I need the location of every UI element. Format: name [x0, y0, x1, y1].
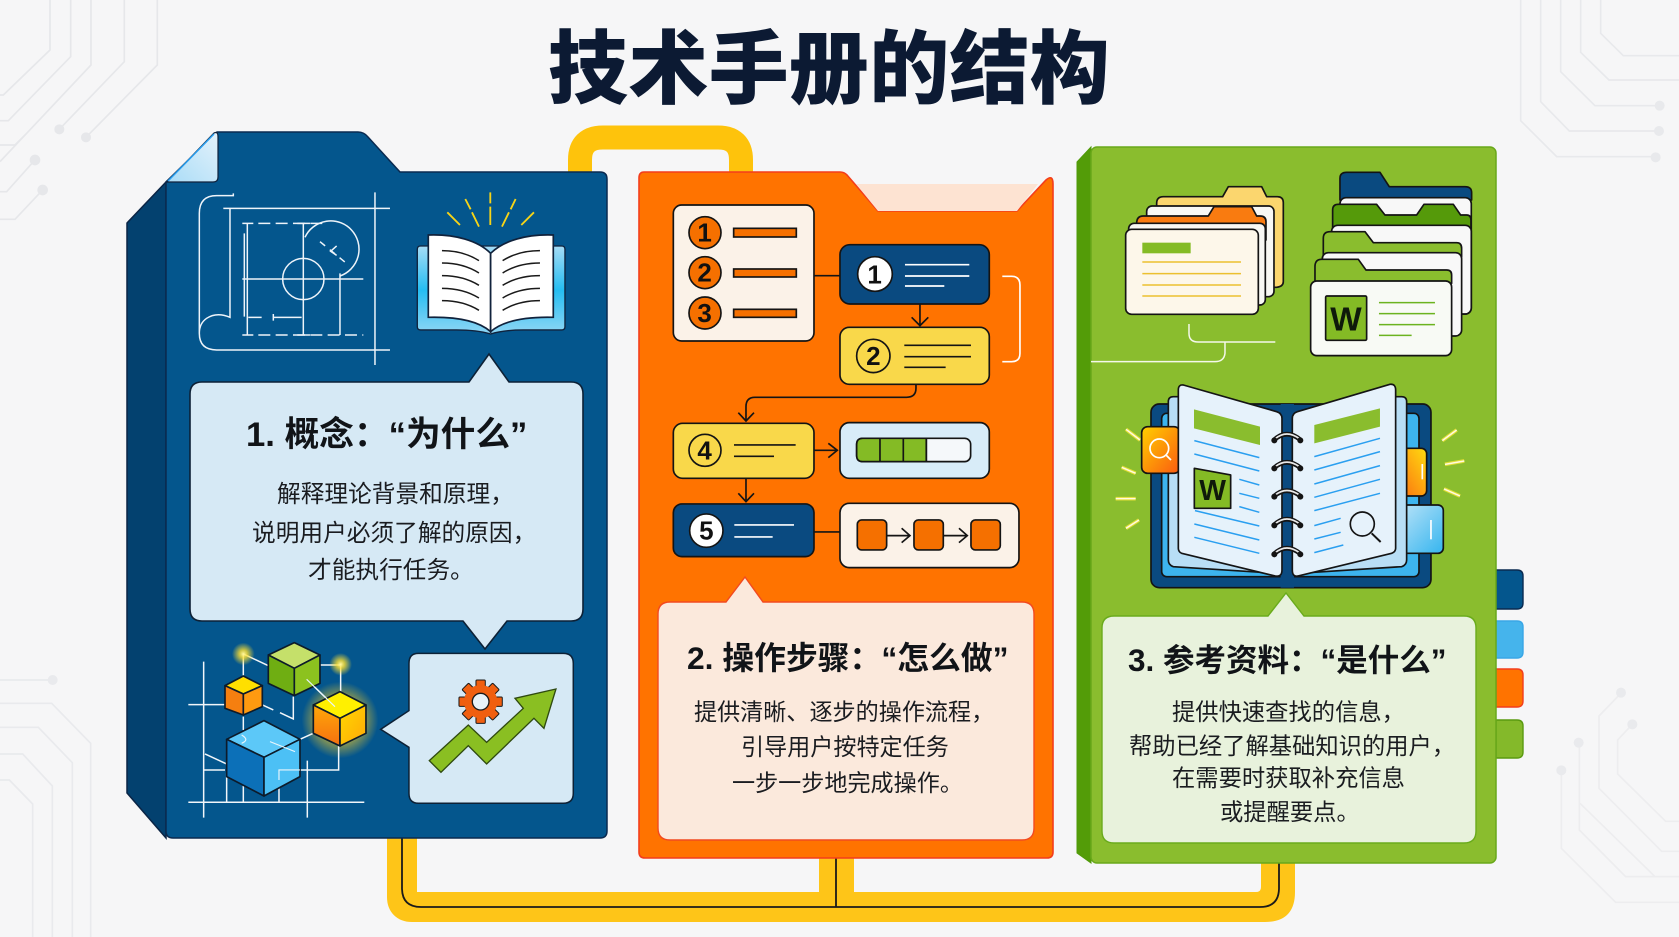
callout: gear and growth arrow	[381, 653, 573, 803]
panel body	[639, 172, 1053, 858]
connectors	[738, 276, 928, 532]
body text: 或提醒要点。	[1220, 799, 1360, 825]
process card	[840, 503, 1019, 568]
step 2: 2	[866, 341, 881, 371]
left index tab	[1142, 427, 1180, 473]
icon: gear	[459, 680, 502, 723]
body text: 才能执行任务。	[308, 557, 474, 584]
connector: bottom bus	[402, 830, 1295, 922]
callout: concept text	[190, 354, 583, 649]
progress card	[840, 423, 989, 478]
left page	[1178, 385, 1282, 576]
panel side face	[1077, 147, 1091, 863]
spine	[1281, 404, 1294, 588]
numbered list card: 2	[697, 258, 712, 288]
circuit pattern: top right	[1521, 0, 1679, 162]
icon: green file stack with W: W	[1330, 302, 1362, 339]
body text: 帮助已经了解基础知识的用户，	[1129, 733, 1455, 759]
heading: 2. 操作步骤：“怎么做”	[687, 640, 1009, 676]
step 1	[840, 245, 989, 304]
numbered list card: 1	[697, 218, 712, 248]
icon: growth arrow	[429, 689, 556, 772]
heading: 3. 参考资料：“是什么”	[1128, 642, 1447, 678]
panel front face	[1091, 147, 1496, 863]
icon: ring binder notebook	[1116, 384, 1464, 588]
white connector lines	[1091, 324, 1275, 362]
back pages	[1168, 397, 1277, 573]
right index tabs	[1397, 448, 1427, 496]
panel: steps (orange)	[639, 172, 1053, 858]
body text	[694, 699, 994, 796]
circuit pattern: bottom left	[0, 675, 91, 937]
body text: 提供快速查找的信息，	[1172, 699, 1405, 725]
panel side face	[127, 182, 166, 838]
glow rays	[1116, 429, 1464, 528]
icon: yellow folder stack	[1126, 187, 1283, 314]
body text	[1129, 699, 1455, 825]
icon: isometric cubes	[188, 643, 378, 818]
panel: concept (blue)	[127, 132, 607, 838]
icon: green file stack with W	[1311, 172, 1472, 356]
body text: 说明用户必须了解的原因，	[252, 520, 536, 547]
icon: blueprint	[199, 192, 390, 365]
title: 技术手册的结构	[548, 25, 1110, 114]
body text: 一步一步地完成操作。	[732, 770, 963, 796]
circuit pattern: bottom right	[1556, 688, 1679, 902]
panel: reference (green)	[1077, 147, 1523, 863]
connector: top loop	[580, 138, 741, 175]
icon: open book	[417, 192, 565, 334]
icon: ring binder notebook: W	[1199, 475, 1226, 507]
step 5: 5	[699, 516, 714, 546]
body text: 引导用户按特定任务	[741, 734, 949, 760]
tab highlight	[856, 184, 1038, 211]
body text: 在需要时获取补充信息	[1172, 765, 1405, 791]
callout: steps text	[658, 577, 1034, 840]
page content	[1194, 409, 1260, 445]
body text: 提供清晰、逐步的操作流程，	[694, 699, 994, 725]
bracket	[1002, 276, 1020, 362]
binder rings	[1274, 434, 1301, 554]
circuit pattern: top left	[0, 0, 157, 219]
step 4	[673, 423, 814, 478]
right page	[1292, 384, 1396, 576]
panel front face	[166, 132, 607, 838]
step 4: 4	[697, 435, 712, 465]
step 2	[840, 327, 989, 384]
side tabs	[1496, 570, 1523, 758]
heading: 1. 概念：“为什么”	[246, 415, 527, 454]
icon: flow diagram	[673, 205, 1020, 568]
step 5	[673, 504, 814, 557]
folded corner	[167, 132, 218, 182]
body text	[252, 481, 536, 584]
callout: reference text	[1102, 593, 1476, 843]
step 1: 1	[867, 259, 882, 289]
numbered list card	[673, 205, 814, 341]
numbered list card: 3	[697, 298, 712, 328]
body text: 解释理论背景和原理，	[277, 481, 514, 508]
